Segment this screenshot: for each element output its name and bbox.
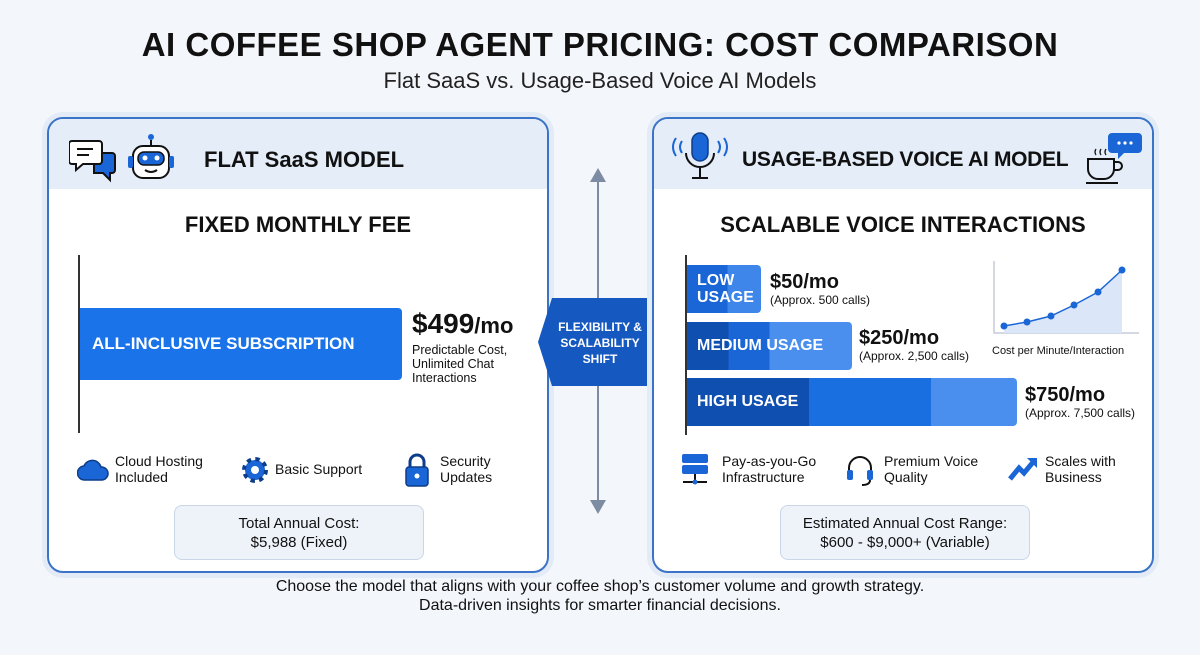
bar	[80, 308, 402, 380]
bar: high	[687, 378, 1017, 426]
callout: flexibility shift: SHIFT	[583, 352, 617, 366]
label: low: (Approx. 500 calls)	[770, 293, 870, 307]
bar chart: subscription	[78, 255, 513, 433]
price label: Predictable Cost,	[412, 343, 507, 357]
total box: Estimated Annual Cost Range:	[803, 515, 1007, 532]
features: Pay-as-you-Go	[722, 453, 816, 469]
features: Quality	[884, 469, 928, 485]
features: Infrastructure	[722, 469, 804, 485]
label: high: (Approx. 7,500 calls)	[1025, 406, 1135, 420]
icon: chat bubbles	[69, 140, 116, 182]
heading: FLAT SaaS MODEL	[204, 147, 404, 172]
icon: microphone	[672, 132, 728, 179]
features: Cloud Hosting	[115, 453, 203, 469]
panel: flat saas	[47, 117, 549, 573]
header band	[49, 119, 547, 189]
icon: headset	[847, 456, 873, 486]
bar: medium	[687, 322, 852, 370]
panel: usage-based	[652, 117, 1154, 573]
features: Scales with	[1045, 453, 1116, 469]
icon: gear	[242, 457, 268, 483]
section heading: FIXED MONTHLY FEE	[185, 212, 411, 237]
section heading: SCALABLE VOICE INTERACTIONS	[720, 212, 1086, 237]
features: Updates	[440, 469, 492, 485]
line chart: cost per minute: Cost per Minute/Interaction	[992, 345, 1124, 357]
total box	[174, 505, 424, 560]
total box: Total Annual Cost:	[239, 515, 359, 532]
bar: medium: MEDIUM USAGE	[697, 337, 823, 354]
icon: servers	[682, 454, 708, 484]
features: Business	[1045, 469, 1102, 485]
label: medium: (Approx. 2,500 calls)	[859, 349, 969, 363]
bar: low: LOW	[697, 272, 734, 289]
label: medium	[859, 327, 969, 363]
features: Security	[440, 453, 491, 469]
label: medium: $250/mo	[859, 327, 939, 349]
label: high	[1025, 384, 1135, 420]
line chart: cost per minute	[992, 261, 1139, 357]
features	[682, 453, 1116, 486]
icon: cloud	[77, 460, 109, 481]
features: Premium Voice	[884, 453, 978, 469]
title: AI COFFEE SHOP AGENT PRICING: COST COMPARISON	[142, 26, 1058, 63]
total box: $600 - $9,000+ (Variable)	[820, 534, 990, 551]
callout: flexibility shift	[538, 298, 647, 386]
bar: low	[687, 265, 761, 313]
subtitle: Flat SaaS vs. Usage-Based Voice AI Models	[384, 68, 816, 93]
features: Basic Support	[275, 461, 362, 477]
label: low	[770, 271, 870, 307]
bar chart: usage tiers	[685, 255, 1135, 435]
footer text: Data-driven insights for smarter financial decisions.	[419, 597, 781, 614]
price label: Interactions	[412, 371, 477, 385]
arrow: vertical double arrow	[590, 168, 606, 514]
price label: $499/mo	[412, 308, 513, 339]
heading: USAGE-BASED VOICE AI MODEL	[742, 148, 1068, 171]
label: low: $50/mo	[770, 271, 839, 293]
price label	[412, 308, 513, 385]
callout: flexibility shift: FLEXIBILITY &	[558, 320, 642, 334]
features	[77, 453, 492, 487]
bar: ALL-INCLUSIVE SUBSCRIPTION	[92, 334, 355, 353]
icon: trend up	[1008, 458, 1037, 481]
total box: $5,988 (Fixed)	[251, 534, 347, 551]
icon: coffee cup	[1086, 133, 1142, 184]
callout: flexibility shift: SCALABILITY	[560, 336, 640, 350]
footer text: Choose the model that aligns with your coffee shop’s customer volume and growth strategy.	[276, 578, 924, 595]
bar: high: HIGH USAGE	[697, 393, 798, 410]
icon: lock	[405, 454, 429, 487]
footer text	[276, 578, 924, 614]
features: Included	[115, 469, 168, 485]
label: high: $750/mo	[1025, 384, 1105, 406]
bar: low: USAGE	[697, 289, 754, 306]
header band	[654, 119, 1152, 189]
total box	[780, 505, 1030, 560]
icon: robot	[128, 134, 174, 179]
price label: Unlimited Chat	[412, 357, 494, 371]
